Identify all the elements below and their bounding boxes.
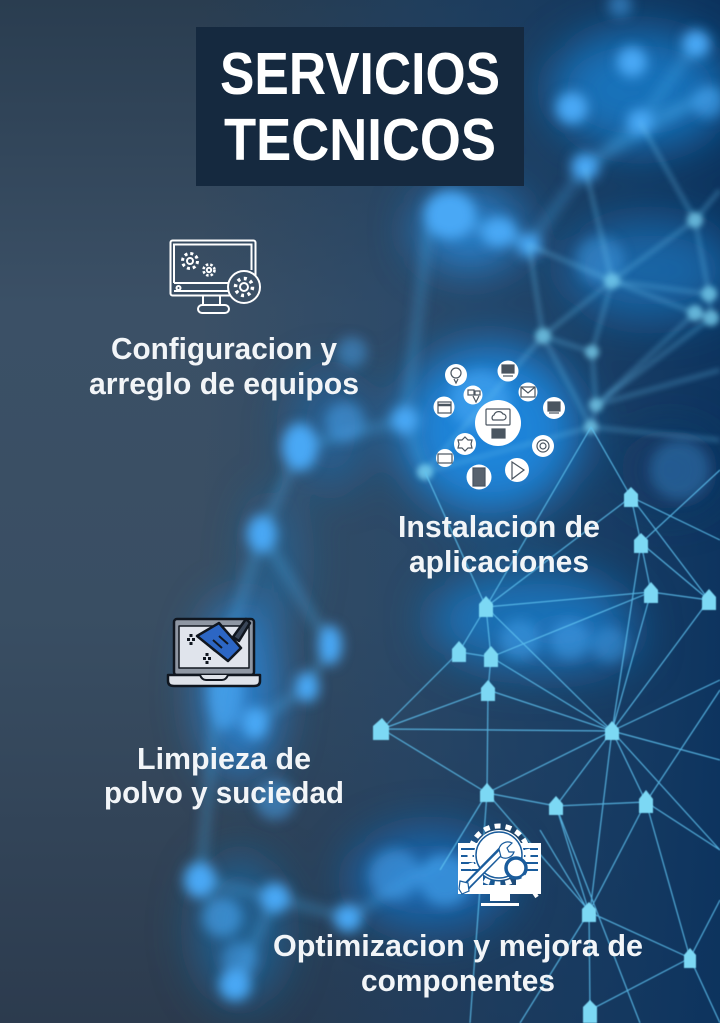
title text [220,41,500,173]
label: configuracion: Configuracion y [111,331,338,366]
label: instalacion [398,509,600,579]
label: limpieza: Limpieza de [137,741,311,776]
network: sharp links [382,427,720,1023]
label: optimizacion: componentes [361,963,555,998]
network: blurred far nodes and links [184,0,720,1001]
icon: applications hub [434,360,565,490]
label: optimizacion [273,928,643,998]
label: limpieza: polvo y suciedad [104,775,344,810]
title text: TECNICOS [224,107,496,173]
label: limpieza [104,741,344,810]
title text: SERVICIOS [220,41,500,107]
icon: optimization tools [458,826,541,906]
icon: laptop with brush [168,619,260,686]
network: sharp nodes [373,487,716,1023]
label: instalacion: Instalacion de [398,509,600,544]
label: instalacion: aplicaciones [409,544,589,579]
title box [196,27,524,186]
label: configuracion [89,331,359,401]
network: soft upper links [417,122,720,480]
label: configuracion: arreglo de equipos [89,366,359,401]
label: optimizacion: Optimizacion y mejora de [273,928,643,963]
icon: monitor with gears [170,240,260,313]
